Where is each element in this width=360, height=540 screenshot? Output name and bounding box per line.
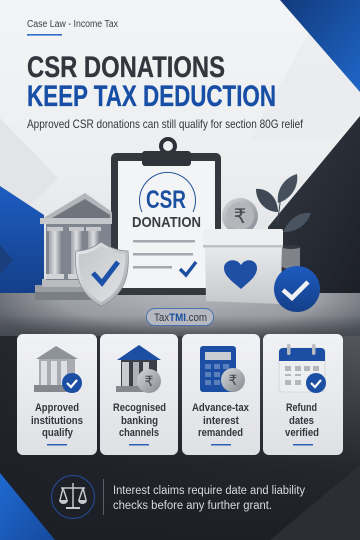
card: approved institutions <box>17 334 97 455</box>
card: advance-tax interest <box>182 334 260 455</box>
icon: plant <box>256 174 311 269</box>
icon: scales of justice <box>52 476 94 518</box>
card text: dates <box>289 415 314 427</box>
icon: shield <box>75 242 128 306</box>
brand pill <box>146 308 214 326</box>
footer note: Interest claims require date and liability <box>113 485 305 497</box>
card text: remanded <box>198 427 243 439</box>
card text: qualify <box>42 427 74 439</box>
card text: verified <box>285 427 319 439</box>
card text: Recognised <box>113 402 166 414</box>
card text: Approved <box>35 402 79 414</box>
title <box>27 51 276 113</box>
title line 1: CSR DONATIONS <box>27 51 225 84</box>
icon: donation box <box>203 198 283 304</box>
category label: Case Law - Income Tax <box>27 19 118 30</box>
icon: heart <box>224 260 257 289</box>
icon: form check <box>180 262 196 275</box>
card text: interest <box>203 415 239 427</box>
title line 2: KEEP TAX DEDUCTION <box>27 80 276 113</box>
brand pill: TaxTMI.com <box>154 312 207 324</box>
icon: bank <box>35 193 112 300</box>
card text: Refund <box>286 402 317 414</box>
form lines <box>133 240 195 268</box>
CSR seal: CSR <box>146 186 186 214</box>
icon: blue check badge <box>274 266 320 312</box>
clipboard <box>111 139 221 295</box>
card text: channels <box>119 427 159 439</box>
card: refund dates <box>263 334 343 455</box>
icon: calculator with rupee: ₹ <box>229 372 238 388</box>
clipboard clip <box>142 139 191 166</box>
card text: institutions <box>31 415 83 427</box>
card: banking channels <box>100 334 178 455</box>
divider <box>102 479 105 515</box>
card text: Advance-tax <box>192 402 250 414</box>
icon: bank with check <box>34 346 82 393</box>
CSR seal: DONATION <box>132 214 201 231</box>
footer note: checks before any further grant. <box>113 500 272 512</box>
CSR seal <box>132 172 201 231</box>
card text: banking <box>121 415 158 427</box>
icon: blue bank with rupee: ₹ <box>145 373 154 389</box>
subtitle: Approved CSR donations can still qualify for section 80G relief <box>27 117 304 131</box>
icon: rupee coin: ₹ <box>234 206 246 228</box>
icon: calendar with check <box>279 344 326 393</box>
